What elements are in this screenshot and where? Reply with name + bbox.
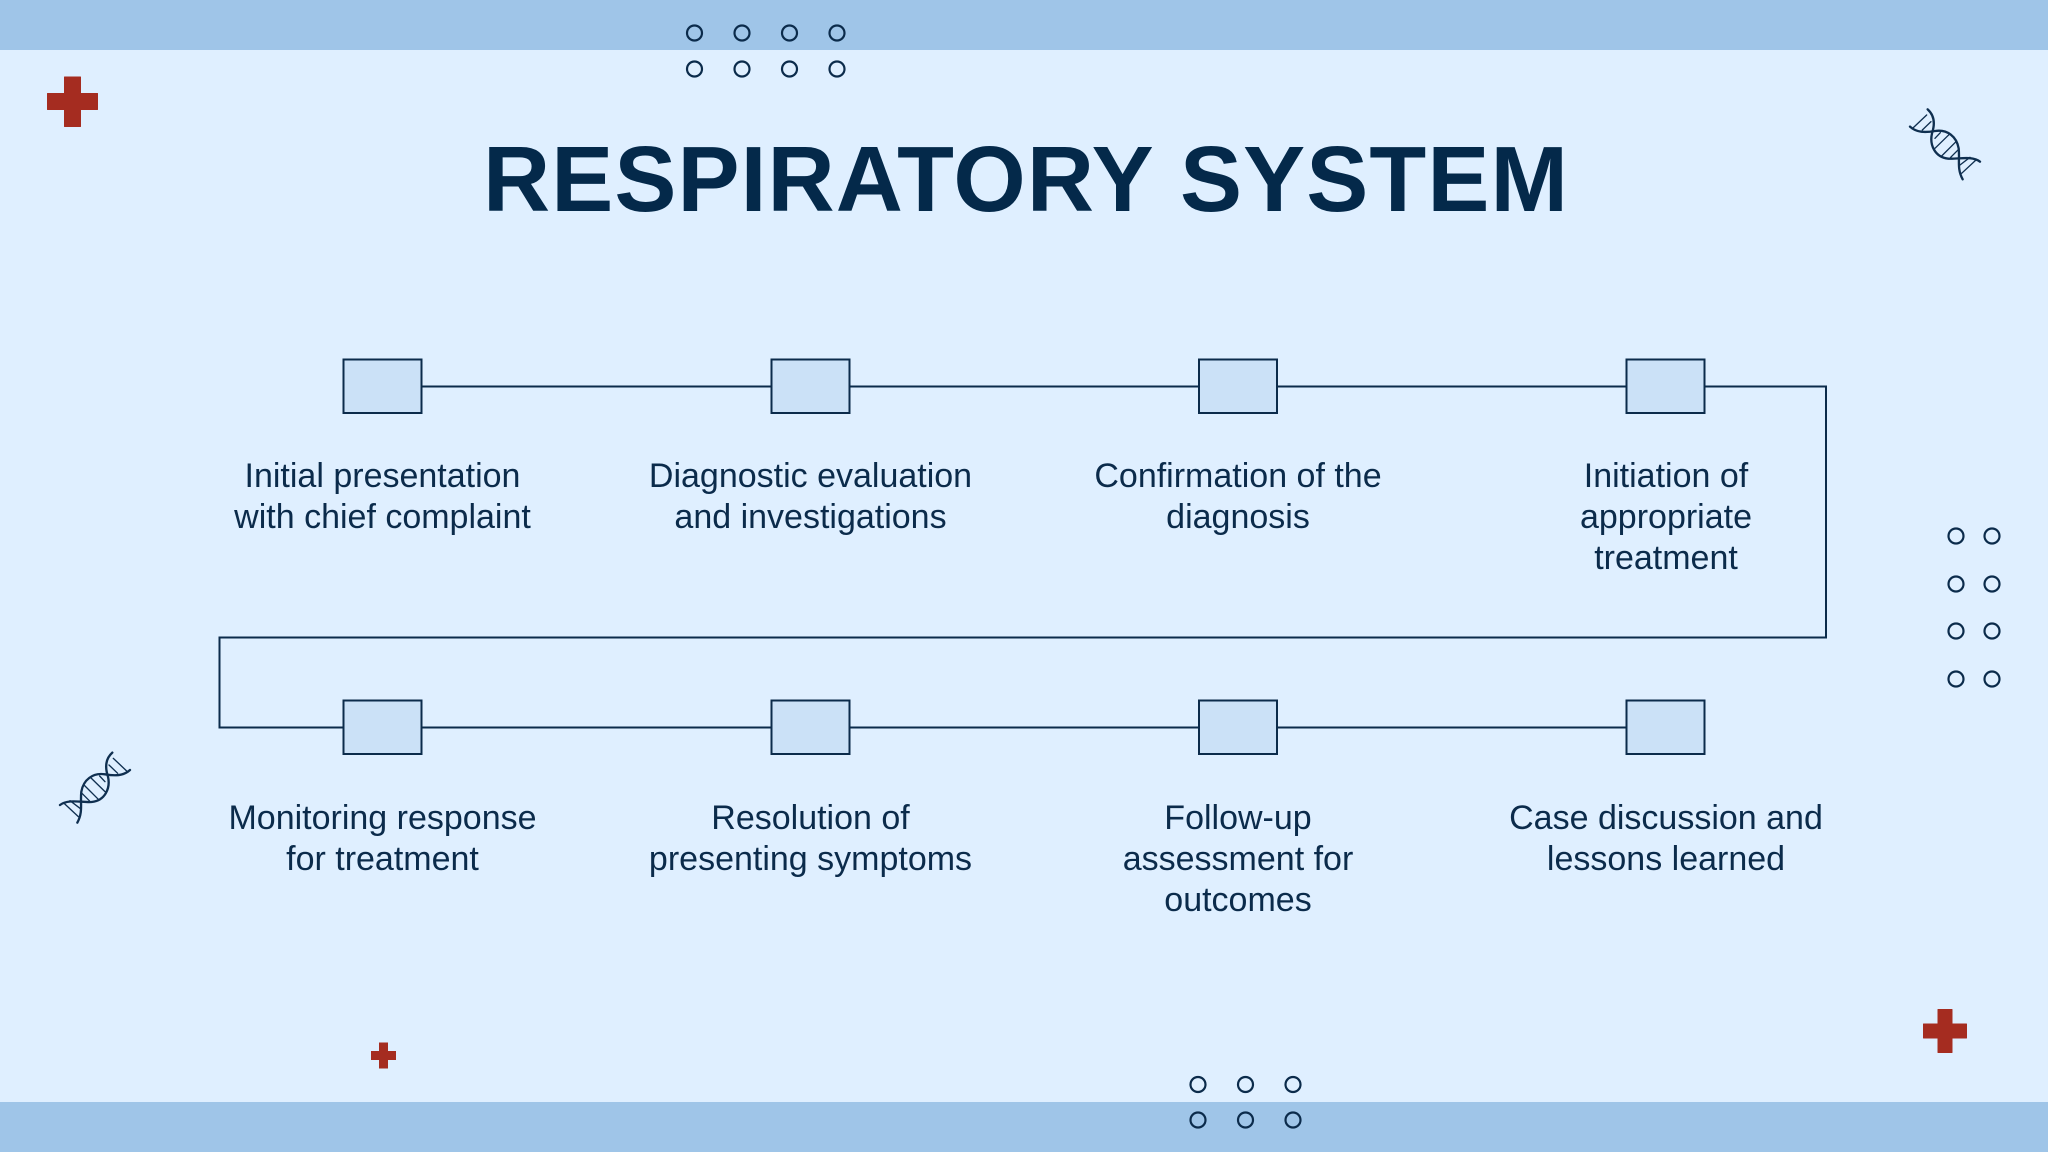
icon: red cross bottom right: [1924, 1010, 1966, 1052]
step 6 label: presenting symptoms: [649, 840, 972, 878]
dots: bottom: [1190, 1077, 1300, 1128]
step box 6: [772, 700, 850, 754]
step 1 label: with chief complaint: [234, 498, 531, 536]
step 3 label: Confirmation of the: [1094, 456, 1382, 494]
step box 5: [344, 700, 422, 754]
step box 1: [344, 360, 422, 413]
icon: small red cross bottom left: [371, 1042, 396, 1068]
step 5 label: [228, 798, 537, 878]
step 4 label: Initiation of: [1584, 456, 1748, 494]
step box 3: [1199, 360, 1277, 413]
step 1 label: Initial presentation: [245, 456, 520, 494]
step 4 label: appropriate: [1580, 498, 1752, 536]
step 4 label: [1580, 456, 1752, 576]
title: RESPIRATORY SYSTEM: [483, 127, 1569, 231]
top band: [0, 0, 2048, 50]
dots: top: [687, 26, 844, 76]
step box 7: [1199, 700, 1277, 754]
step 7 label: Follow-up: [1164, 798, 1312, 836]
step 3 label: diagnosis: [1166, 498, 1310, 536]
step 2 label: [649, 456, 972, 536]
step 2 label: Diagnostic evaluation: [649, 456, 972, 494]
icon: DNA top right: [1910, 109, 1980, 179]
step 7 label: [1123, 798, 1353, 918]
step box 2: [772, 360, 850, 413]
step 8 label: [1509, 798, 1823, 878]
icon: DNA left: [60, 753, 130, 823]
connector line: [220, 386, 1826, 728]
step 6 label: Resolution of: [711, 798, 910, 836]
step 3 label: [1094, 456, 1382, 536]
bottom band: [0, 1102, 2048, 1152]
step box 4: [1626, 360, 1704, 413]
step 8 label: lessons learned: [1547, 840, 1785, 878]
step 5 label: Monitoring response: [228, 798, 537, 836]
dots: right: [1948, 528, 2000, 686]
step 2 label: and investigations: [674, 498, 947, 536]
step 5 label: for treatment: [286, 840, 479, 878]
step 7 label: outcomes: [1164, 880, 1312, 918]
step 7 label: assessment for: [1123, 840, 1353, 878]
step 8 label: Case discussion and: [1509, 798, 1823, 836]
step 6 label: [649, 798, 972, 878]
step 1 label: [234, 456, 531, 536]
step box 8: [1626, 700, 1704, 754]
step 4 label: treatment: [1594, 538, 1738, 576]
icon: red cross top left: [48, 77, 98, 126]
